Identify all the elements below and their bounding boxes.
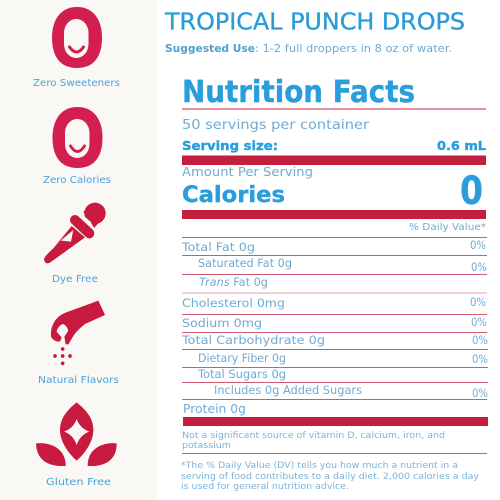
panel: nutrition facts label (181, 75, 488, 492)
row: saturated fat: 0% (471, 260, 487, 274)
row: total carbohydrate (181, 333, 488, 347)
row: cholesterol: 0% (470, 295, 486, 309)
row: cholesterol (182, 295, 486, 310)
title: TROPICAL PUNCH DROPS (164, 10, 465, 36)
row: cholesterol: Cholesterol 0mg (182, 296, 285, 310)
row: saturated fat (198, 256, 487, 274)
row: dietary fiber (198, 351, 488, 366)
calories: 0 (460, 169, 483, 214)
daily value footnote: serving of food contributes to a daily diet. 2,000 calories a day (181, 472, 479, 482)
icon: hand sprinkling flavor (51, 301, 105, 365)
row: dietary fiber: 0% (472, 352, 488, 366)
row: total sugars: Total Sugars 0g (197, 367, 286, 381)
row: saturated fat: Saturated Fat 0g (198, 256, 292, 270)
row: protein: Protein 0g (183, 401, 246, 416)
label: dye free: Dye Free (52, 274, 98, 285)
icon: zero sweeteners (52, 7, 102, 68)
servings per container: 50 servings per container (182, 117, 369, 133)
suggested use (165, 42, 452, 55)
daily value header: % Daily Value* (409, 222, 486, 233)
calories: Calories (182, 183, 285, 208)
heading: nutrition facts: Nutrition Facts (182, 75, 415, 110)
label: zero calories: Zero Calories (43, 175, 111, 186)
daily value footnote: *The % Daily Value (DV) tells you how much a nutrient in a (181, 461, 458, 471)
label: natural flavors: Natural Flavors (38, 375, 119, 386)
vitamin note: Not a significant source of vitamin D, calcium, iron, and (182, 431, 445, 441)
row: sodium: 0% (471, 315, 487, 329)
row: total fat (181, 238, 486, 254)
label: gluten free: Gluten Free (46, 477, 111, 488)
serving size (182, 138, 486, 153)
vitamin note: potassium (182, 441, 231, 451)
row: sodium: Sodium 0mg (182, 316, 262, 330)
row: trans fat: Trans Fat 0g (199, 275, 268, 289)
serving size: 0.6 mL (437, 138, 486, 153)
suggested use: Suggested Use (165, 42, 255, 55)
row: total fat: 0% (470, 238, 486, 252)
row: sodium (182, 315, 487, 330)
row: dietary fiber: Dietary Fiber 0g (198, 351, 286, 365)
row: added sugars: 0% (472, 386, 488, 400)
suggested use: : 1-2 full droppers in 8 oz of water. (255, 42, 452, 55)
daily value footnote: is used for general nutrition advice. (181, 482, 349, 492)
row: added sugars: Includes 0g Added Sugars (214, 383, 362, 397)
amount per serving: Amount Per Serving (182, 164, 313, 179)
daily value footnote (181, 461, 479, 492)
calories (182, 169, 483, 214)
row: total carbohydrate: 0% (472, 333, 488, 347)
row: added sugars (214, 383, 488, 400)
row: total fat: Total Fat 0g (181, 240, 255, 254)
serving size: Serving size: (182, 138, 278, 153)
panel: product claims sidebar (0, 0, 157, 500)
label: zero sweeteners: Zero Sweeteners (33, 78, 120, 89)
row: total carbohydrate: Total Carbohydrate 0g (181, 333, 325, 347)
vitamin note (182, 431, 445, 451)
icon: dropper (44, 203, 106, 263)
icon: gluten free leaves (36, 402, 117, 466)
icon: zero calories (52, 107, 102, 168)
